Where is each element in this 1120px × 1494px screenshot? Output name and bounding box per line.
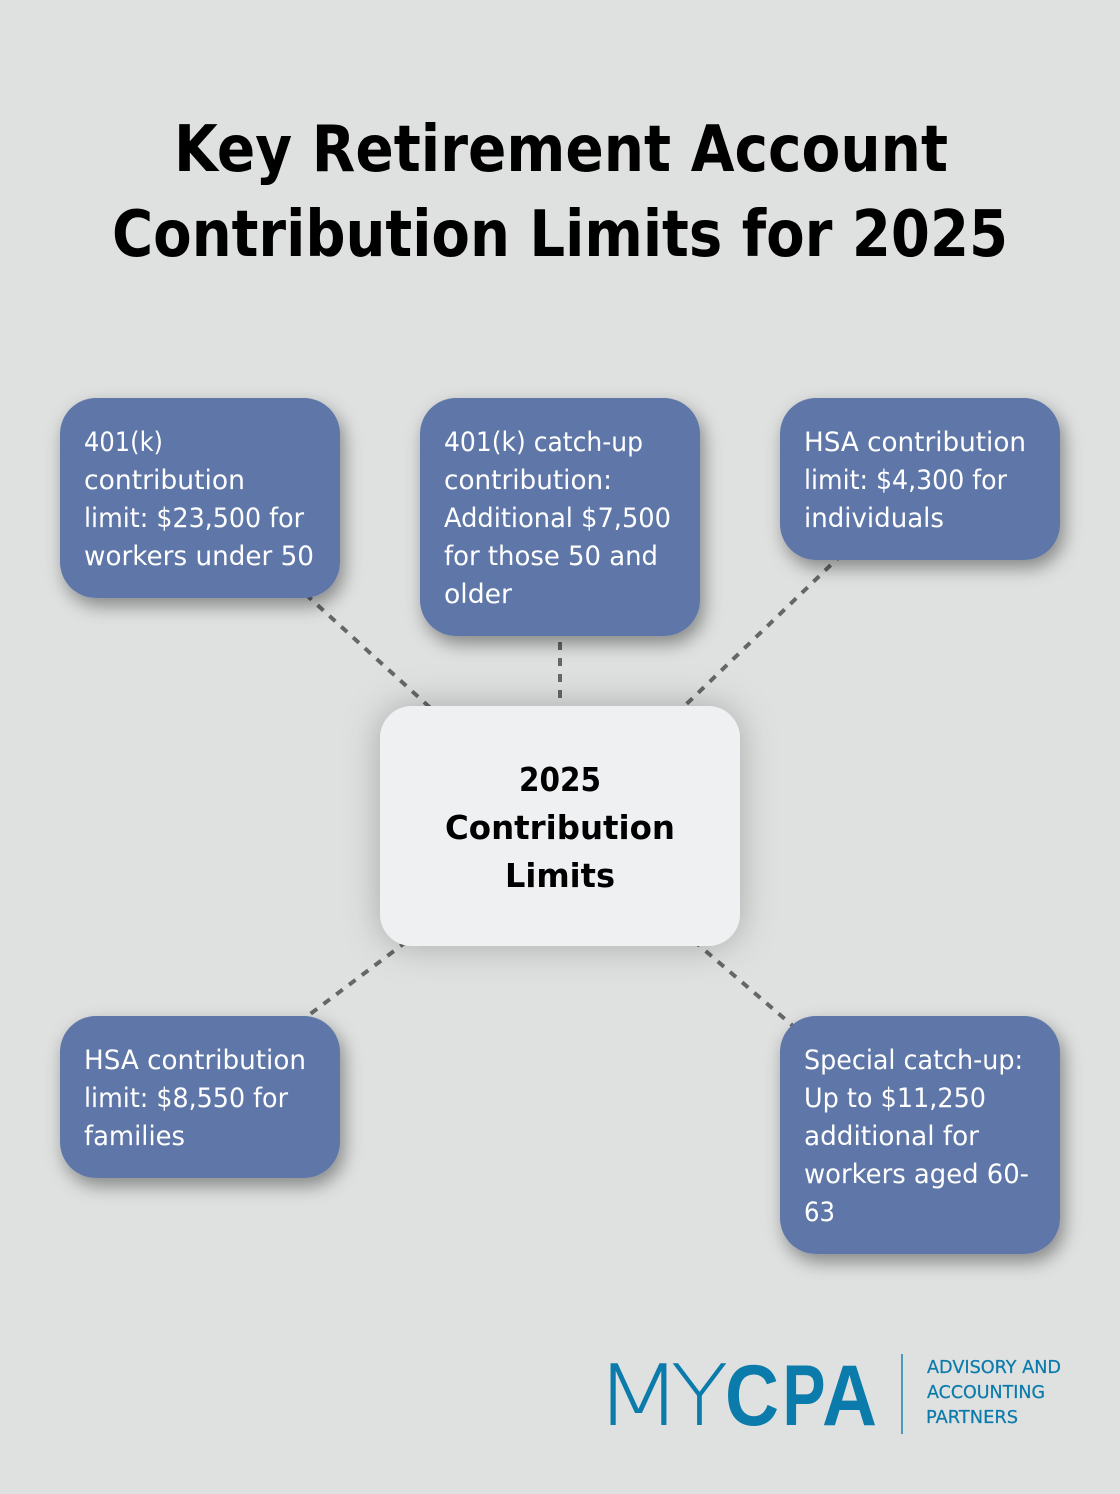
panel: HSA limit for families <box>60 1016 340 1178</box>
panel: 401(k) contribution limit: limit: $23,500 for <box>84 503 305 534</box>
panel: HSA limit for families: HSA contribution <box>84 1045 306 1076</box>
panel: HSA limit for individuals: HSA contribution <box>804 427 1026 458</box>
panel: center 2025 contribution limits: Limits <box>505 856 615 895</box>
panel: 401(k) catch-up contribution: for those 50 and <box>444 541 658 572</box>
panel: HSA limit for families: families <box>84 1121 185 1152</box>
connector: HSA individuals to center <box>560 479 920 826</box>
panel: special catch-up: Up to $11,250 <box>804 1083 986 1114</box>
panel: special catch-up: additional for <box>804 1121 980 1152</box>
logo: MYCPA: A <box>822 1348 877 1444</box>
panel: special catch-up: workers aged 60- <box>804 1159 1029 1190</box>
logo: MYCPA: PARTNERS <box>926 1407 1018 1428</box>
panel: center 2025 contribution limits: Contribution <box>445 808 675 847</box>
logo: MYCPA: C <box>725 1348 779 1444</box>
panel: HSA limit for individuals <box>780 398 1060 560</box>
panel: 401(k) catch-up contribution: 401(k) catch-up <box>444 427 643 458</box>
connector: 401(k) limit to center <box>200 498 560 826</box>
panel: HSA limit for individuals: individuals <box>804 503 944 534</box>
panel: special catch-up: 63 <box>804 1197 835 1228</box>
panel: 401(k) catch-up contribution: Additional $7,500 <box>444 503 671 534</box>
panel: center 2025 contribution limits: 2025 <box>519 760 601 799</box>
panel: 401(k) catch-up contribution: older <box>444 579 513 610</box>
panel: HSA limit for individuals: limit: $4,300 for <box>804 465 1008 496</box>
logo: MYCPA: P <box>782 1348 826 1444</box>
connector: 401(k) catch-up to center <box>558 517 562 826</box>
panel: 401(k) contribution limit: contribution <box>84 465 245 496</box>
panel: special catch-up: Special catch-up: <box>804 1045 1023 1076</box>
panel: 401(k) catch-up contribution <box>420 398 700 636</box>
panel: special catch-up <box>780 1016 1060 1254</box>
panel: 401(k) catch-up contribution: contribution: <box>444 465 612 496</box>
panel: 401(k) contribution limit: workers under 50 <box>84 541 314 572</box>
logo: MYCPA <box>594 1347 1061 1446</box>
panel: 401(k) contribution limit: 401(k) <box>84 427 163 458</box>
logo: MYCPA: ACCOUNTING <box>927 1382 1045 1403</box>
panel: HSA limit for families: limit: $8,550 for <box>84 1083 289 1114</box>
logo: MYCPA: Y <box>670 1347 728 1446</box>
panel: 401(k) contribution limit <box>60 398 340 598</box>
connector: HSA families to center <box>200 826 560 1097</box>
title: Key Retirement Account <box>174 113 948 187</box>
logo: MYCPA: ADVISORY AND <box>927 1357 1061 1378</box>
title <box>112 113 1008 272</box>
connector: special catch-up to center <box>560 826 920 1135</box>
logo: MYCPA: M <box>594 1347 683 1446</box>
title: Contribution Limits for 2025 <box>112 198 1008 272</box>
panel: center 2025 contribution limits <box>380 706 740 946</box>
